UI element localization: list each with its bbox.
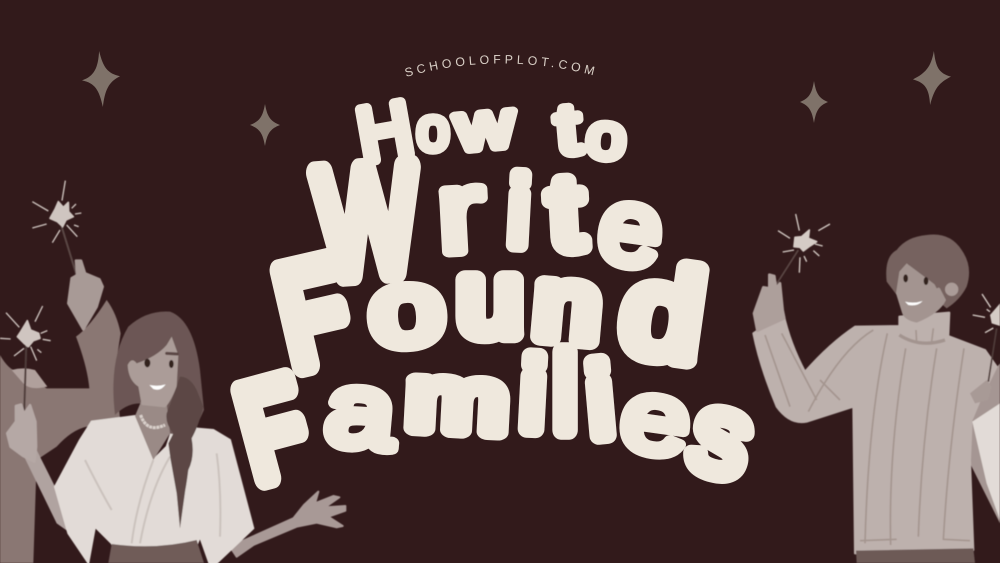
sweater rib lines (765, 328, 970, 545)
sparkler burst right (973, 294, 1000, 333)
title line: Found: o (367, 249, 446, 367)
necklace (141, 415, 165, 428)
back person collar (12, 368, 47, 388)
man's ear (945, 283, 958, 296)
title line: Families: e (615, 356, 698, 479)
title line: Families (224, 332, 766, 508)
title line: Families: i (519, 338, 547, 452)
title line: Found: u (458, 242, 522, 357)
skirt (108, 540, 204, 563)
title line: How to: o (584, 101, 629, 174)
man's hair fringe (908, 243, 960, 288)
blouse (55, 416, 253, 563)
man's neck and face (896, 263, 946, 323)
title line: Families: i (584, 343, 616, 458)
smile (149, 384, 166, 390)
sparkler burst left (778, 214, 830, 273)
right edge person arm (968, 363, 1000, 523)
face (128, 337, 178, 407)
braid (166, 377, 203, 528)
title line: Write: i (506, 157, 532, 267)
eyes (144, 359, 174, 368)
man's sweater (753, 313, 997, 553)
man's hair back (886, 234, 969, 308)
title line: Families: l (554, 332, 576, 453)
sparkler burst lower (0, 306, 51, 361)
title line: Write: t (546, 153, 585, 272)
title line: How to: H (351, 85, 419, 178)
sparkler burst upper (32, 181, 81, 243)
side person's hand (970, 380, 992, 403)
sweater collar shadow (899, 335, 945, 343)
illustration: left group of friends (0, 181, 345, 563)
neck (135, 400, 170, 460)
title line: Families: F (224, 350, 321, 508)
paper held by side person (972, 403, 1000, 520)
hand holding sparkler (7, 405, 36, 462)
title line: How to: o (417, 96, 449, 163)
hair (113, 312, 204, 437)
left arm of woman (23, 450, 68, 532)
title line: Found: d (614, 238, 712, 388)
title line: How to: w (452, 88, 517, 165)
trousers (856, 548, 975, 563)
eyebrow (167, 349, 177, 358)
title line: How to (351, 85, 629, 178)
sparkler stick lower (24, 343, 26, 418)
title line: Write: e (592, 163, 670, 292)
back person raised hand (68, 261, 103, 329)
title line: How to: t (553, 90, 584, 169)
sparkler stick right (988, 328, 997, 382)
back person body and raised arm (0, 300, 121, 563)
blouse fold lines (85, 453, 220, 543)
title line: Families: s (678, 366, 766, 505)
title line: Families: m (405, 347, 510, 452)
title (224, 85, 766, 508)
title line: Found: n (531, 246, 605, 363)
title line: Families: a (322, 350, 401, 472)
icon: sparkle stars (82, 51, 951, 146)
sparkler stick upper (62, 227, 83, 295)
title line: Write: r (434, 147, 487, 277)
right arm of woman (230, 492, 345, 557)
sparkler stick left (772, 250, 798, 292)
man's eyes (903, 274, 928, 285)
title line: Found: F (264, 231, 362, 397)
title line: Write (312, 135, 670, 309)
title line: Write: W (312, 135, 422, 309)
site name: SCHOOLOFPLOT.COM (405, 55, 594, 76)
man's hand (754, 275, 784, 331)
man's smile (905, 301, 923, 305)
illustration: right group of friends (753, 214, 1000, 563)
title line: Found (264, 231, 712, 397)
